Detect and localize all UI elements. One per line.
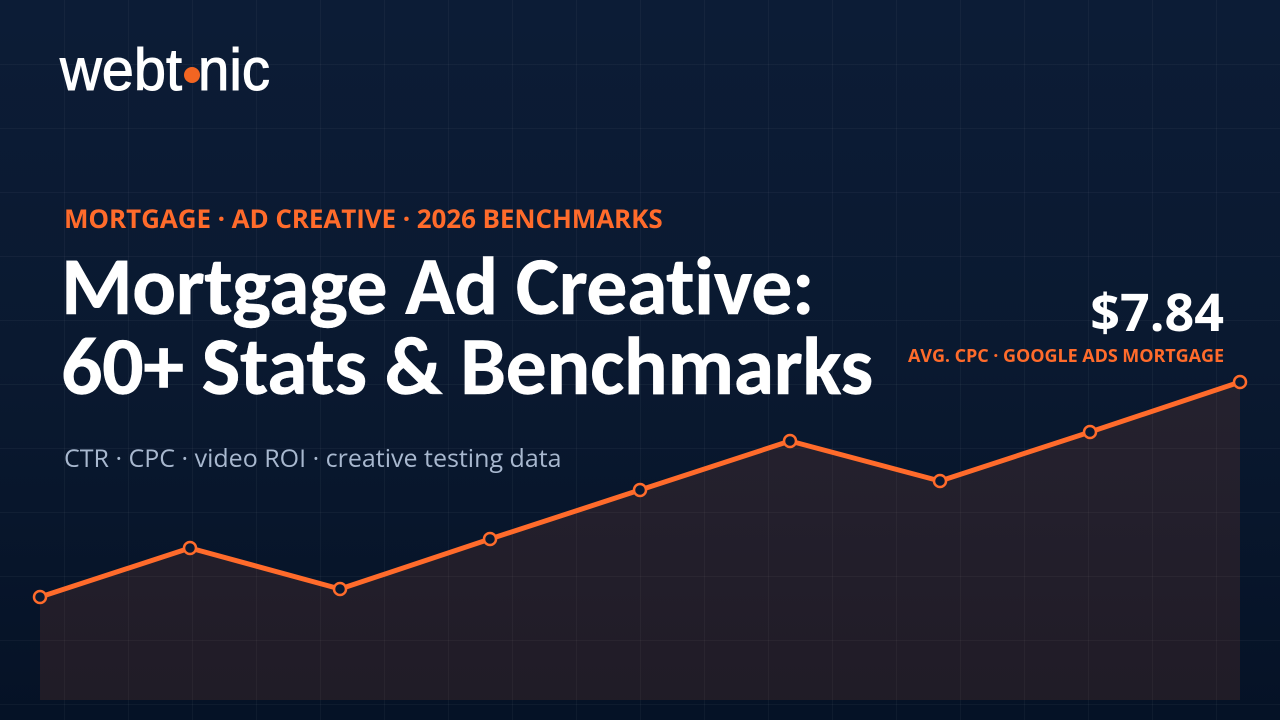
eyebrow label: MORTGAGE · AD CREATIVE · 2026 BENCHMARKS (64, 200, 663, 236)
logo dot (184, 67, 200, 83)
subtitle: CTR · CPC · video ROI · creative testing data (64, 441, 562, 475)
main title: Mortgage Ad Creative: (61, 237, 814, 337)
stat caption: AVG. CPC · GOOGLE ADS MORTGAGE (908, 344, 1224, 368)
stat value: $7.84 (1090, 276, 1224, 347)
main title: 60+ Stats & Benchmarks (61, 317, 873, 417)
logo (59, 40, 270, 103)
chart markers (34, 376, 1246, 603)
chart area fill (40, 382, 1240, 700)
main title (61, 237, 873, 417)
chart line (40, 382, 1240, 597)
